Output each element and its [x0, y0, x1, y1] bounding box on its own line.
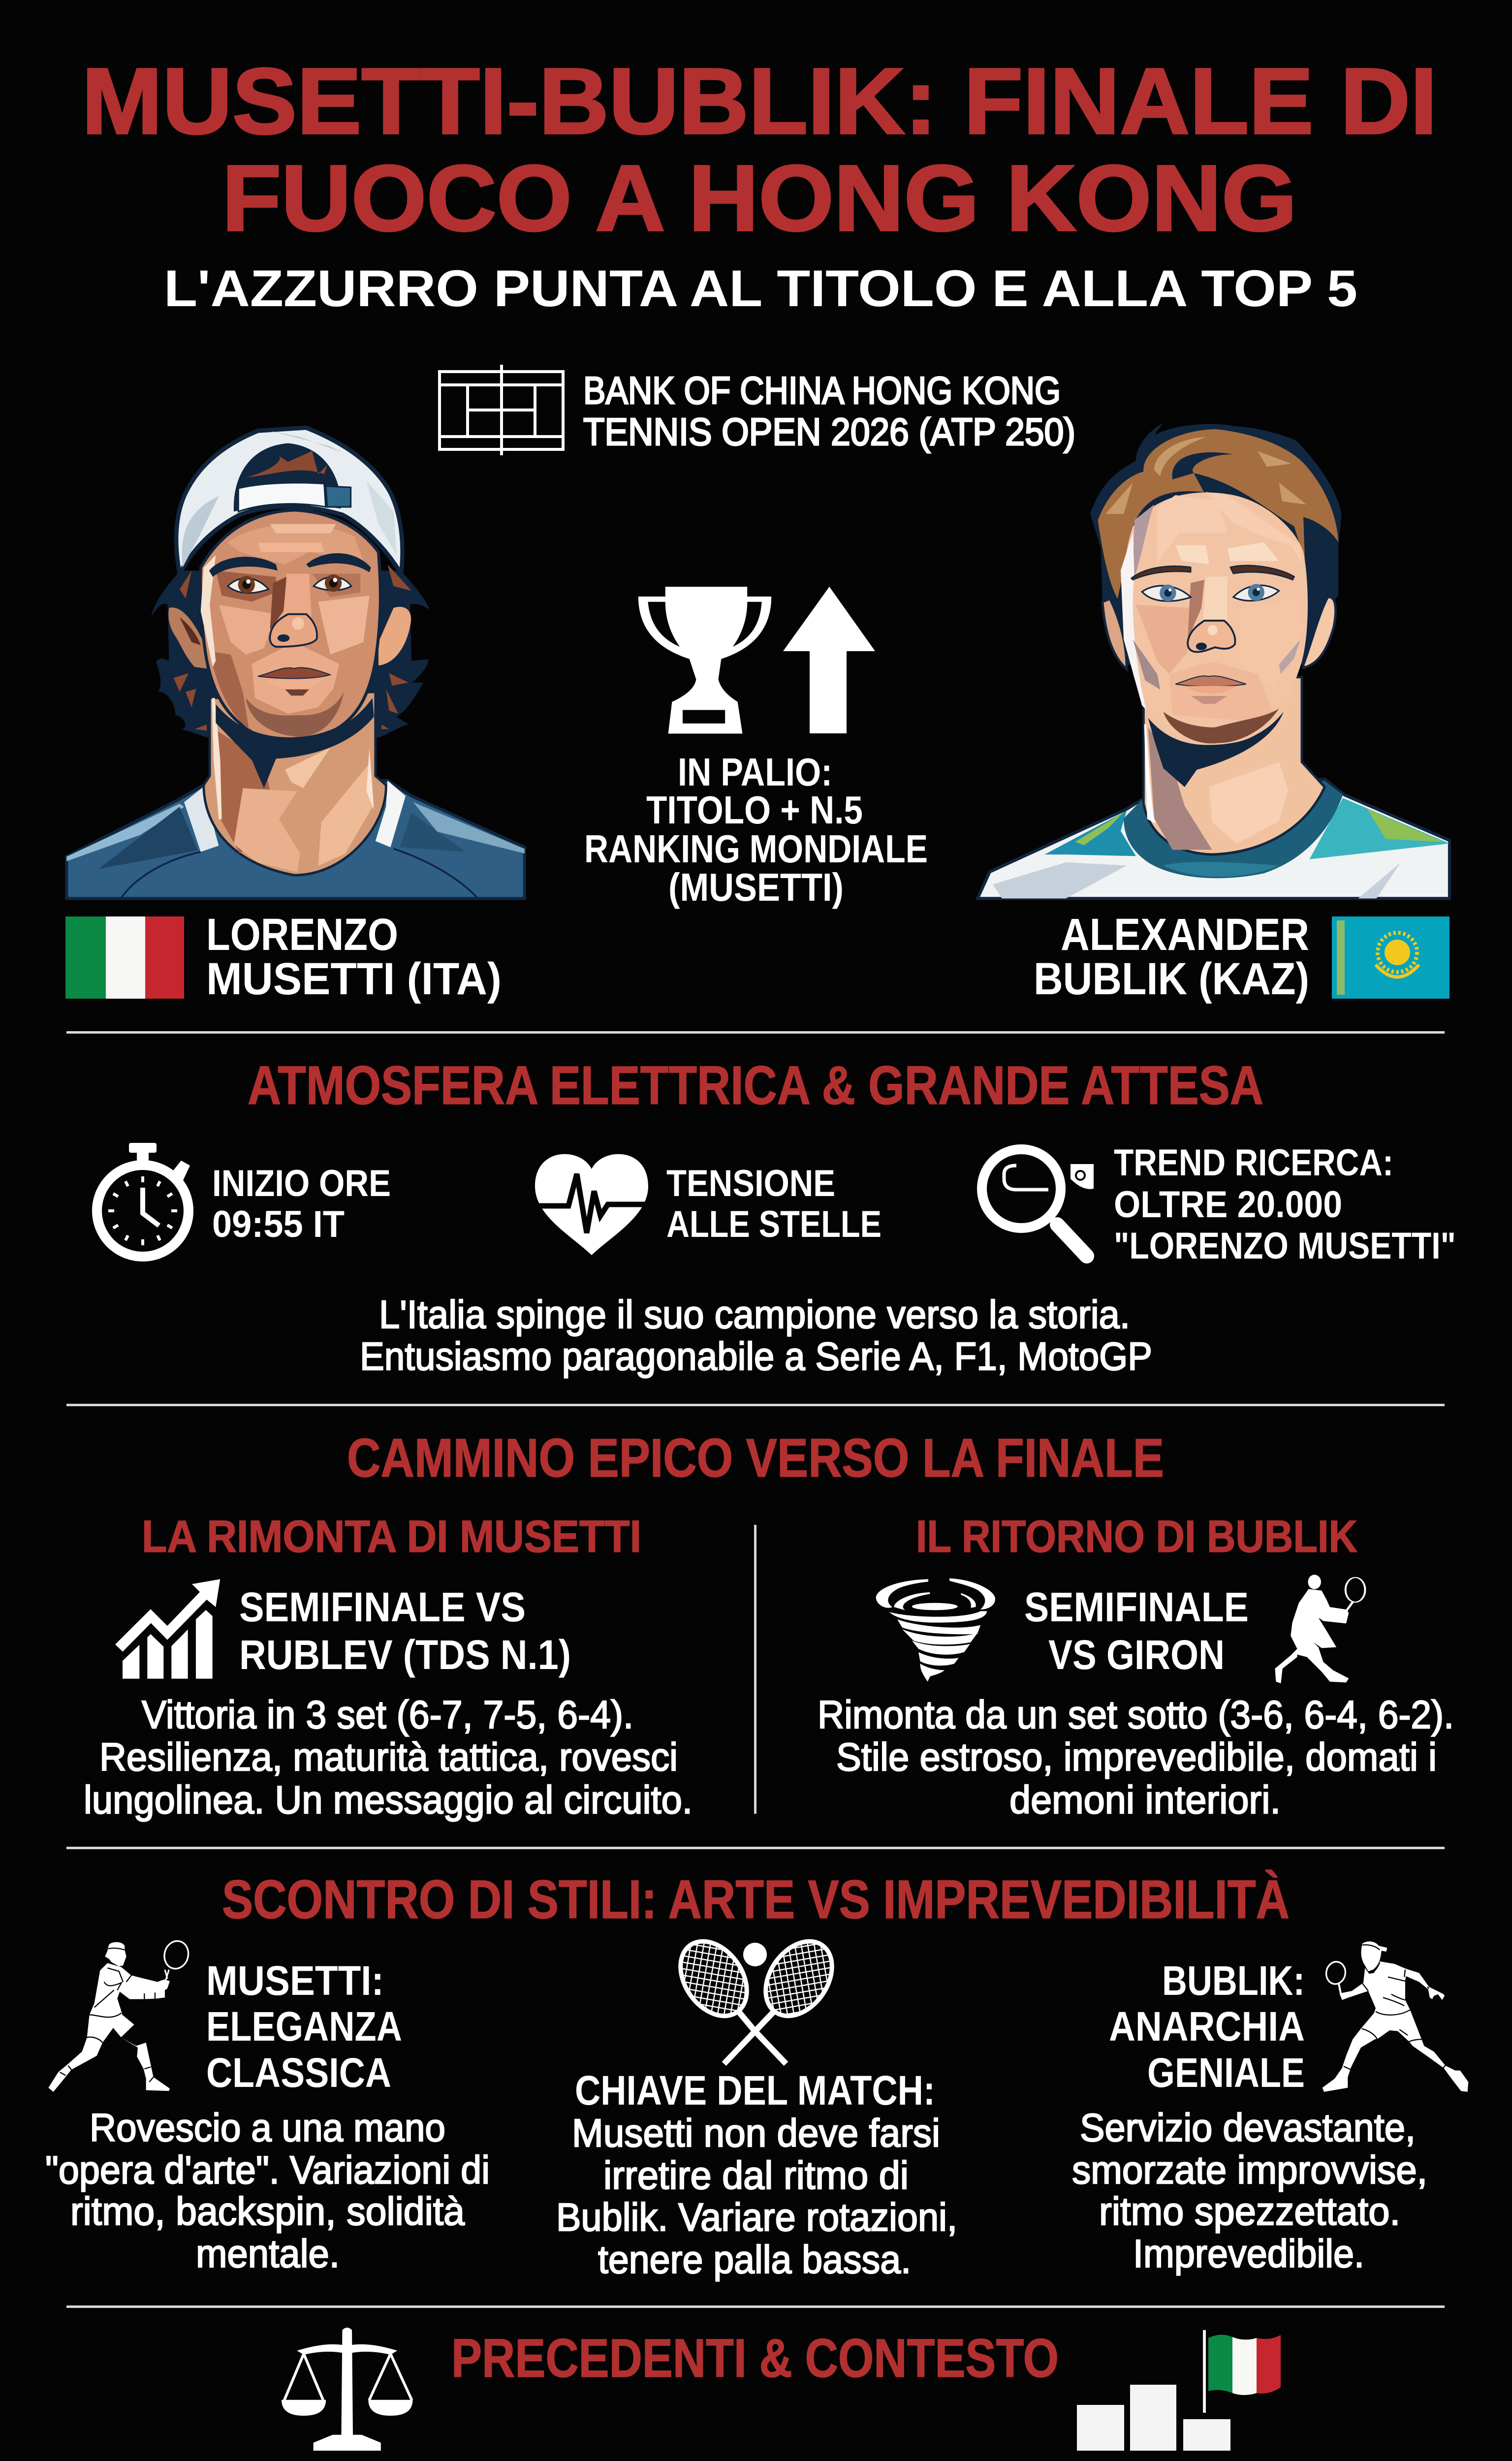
label: semifinal vs Giron: SEMIFINALE [1024, 1584, 1249, 1630]
icon: tornado [876, 1578, 995, 1682]
icon: up arrow [783, 587, 875, 733]
text: Bublik style description: Servizio devastante, [1080, 2106, 1416, 2149]
label: semifinal vs Giron [1024, 1584, 1249, 1678]
label: Musetti style [206, 1957, 402, 2096]
text: match key: Musetti non deve farsi [572, 2111, 940, 2155]
icon: rising chart [115, 1579, 220, 1679]
prize text: IN PALIO: [678, 750, 832, 794]
icon: scales [282, 2328, 412, 2451]
panel: Bublik style [1072, 1941, 1468, 2275]
label: Musetti style: CLASSICA [206, 2050, 391, 2096]
label: Musetti style: MUSETTI: [206, 1957, 384, 2004]
tournament name: TENNIS OPEN 2026 (ATP 250) [583, 410, 1075, 453]
heading: cammino: CAMMINO EPICO VERSO LA FINALE [347, 1428, 1164, 1488]
panel: Musetti style [45, 1938, 490, 2275]
flag: Kazakhstan [1332, 916, 1449, 999]
text: atmosphere description: L'Italia spinge il suo campione verso la storia. [379, 1293, 1130, 1336]
tournament name: BANK OF CHINA HONG KONG [583, 369, 1061, 412]
label: Bublik style: ANARCHIA [1109, 2003, 1305, 2050]
heading: scontro di stili: SCONTRO DI STILI: ARTE VS IMPREVEDIBILITÀ [222, 1869, 1290, 1930]
text: start time: INIZIO ORE [212, 1163, 391, 1204]
label: semifinal vs Rublev: SEMIFINALE VS [239, 1584, 526, 1630]
prize text: (MUSETTI) [668, 865, 844, 909]
title: MUSETTI-BUBLIK: FINALE DI [82, 49, 1437, 154]
text: match key [556, 2067, 957, 2281]
icon: tennis court [440, 365, 563, 455]
text: tension: TENSIONE [666, 1163, 835, 1204]
subheading: Musetti: LA RIMONTA DI MUSETTI [142, 1512, 641, 1562]
icon: Musetti player silhouette [48, 1938, 191, 2092]
icon: magnifying glass [982, 1149, 1094, 1256]
label: Musetti style: ELEGANZA [206, 2003, 402, 2050]
name: Lorenzo Musetti: LORENZO [206, 910, 398, 960]
text: match key: Bublik. Variare rotazioni, [556, 2195, 957, 2239]
title: FUOCO A HONG KONG [222, 146, 1297, 251]
text: Musetti description: Vittoria in 3 set (6-7, 7-5, 6-4). [142, 1693, 633, 1736]
text: tension [666, 1163, 882, 1245]
label: semifinal vs Rublev: RUBLEV (TDS N.1) [239, 1632, 571, 1678]
text: atmosphere description [360, 1293, 1152, 1378]
name: Alexander Bublik: ALEXANDER [1061, 910, 1309, 960]
text: Musetti style description: ritmo, backspin, solidità [70, 2189, 465, 2233]
text: search trend: OLTRE 20.000 [1114, 1184, 1342, 1226]
panel: match key [556, 1929, 957, 2281]
icon: heart with pulse [532, 1154, 652, 1255]
text: Bublik description: Rimonta da un set sotto (3-6, 6-4, 6-2). [818, 1693, 1454, 1736]
text: Bublik style description: smorzate improvvise, [1072, 2148, 1427, 2192]
label: semifinal vs Rublev [239, 1584, 571, 1678]
label: semifinal vs Giron: VS GIRON [1048, 1632, 1225, 1678]
panel: Musetti semifinal [84, 1512, 693, 1822]
portrait: Lorenzo Musetti [66, 428, 525, 899]
text: Musetti style description: "opera d'arte". Variazioni di [45, 2148, 490, 2192]
text: Bublik description [818, 1693, 1454, 1822]
label: Bublik style: BUBLIK: [1162, 1957, 1305, 2004]
text: Bublik description: Stile estroso, imprevedibile, domati i [836, 1735, 1437, 1779]
panel: Bublik semifinal [818, 1512, 1454, 1822]
name: Alexander Bublik: BUBLIK (KAZ) [1034, 954, 1309, 1004]
tournament name [583, 369, 1075, 453]
text: search trend [1114, 1142, 1456, 1267]
text: Bublik style description: ritmo spezzettato. [1099, 2189, 1400, 2233]
prize text: RANKING MONDIALE [584, 827, 928, 871]
text: start time [212, 1163, 391, 1245]
text: Bublik style description [1072, 2106, 1427, 2275]
text: tension: ALLE STELLE [666, 1203, 882, 1245]
icon: stopwatch [97, 1143, 190, 1257]
subheading: Bublik: IL RITORNO DI BUBLIK [916, 1512, 1357, 1562]
title [82, 49, 1437, 251]
prize text [584, 750, 928, 909]
label: Bublik style [1109, 1957, 1305, 2096]
text: Musetti description [84, 1693, 693, 1822]
text: match key: tenere palla bassa. [598, 2238, 911, 2281]
text: Musetti style description: mentale. [196, 2232, 340, 2275]
prize text: TITOLO + N.5 [646, 788, 863, 832]
text: Bublik description: demoni interiori. [1009, 1778, 1281, 1822]
name: Lorenzo Musetti: MUSETTI (ITA) [206, 954, 502, 1004]
text: start time: 09:55 IT [212, 1203, 345, 1245]
name: Lorenzo Musetti [206, 910, 502, 1004]
text: Musetti description: lungolinea. Un messaggio al circuito. [84, 1778, 693, 1822]
text: Bublik style description: Imprevedibile. [1133, 2232, 1364, 2275]
icon: podium with Italian flag [1077, 2330, 1281, 2451]
portrait: Alexander Bublik [977, 423, 1449, 898]
heading: atmosfera: ATMOSFERA ELETTRICA & GRANDE ATTESA [248, 1055, 1263, 1116]
text: Musetti style description [45, 2106, 490, 2275]
subtitle: L'AZZURRO PUNTA AL TITOLO E ALLA TOP 5 [164, 260, 1357, 317]
text: Musetti style description: Rovescio a una mano [90, 2106, 445, 2149]
flag: Italy [65, 916, 184, 999]
text: atmosphere description: Entusiasmo paragonabile a Serie A, F1, MotoGP [360, 1334, 1152, 1378]
label: Bublik style: GENIALE [1147, 2050, 1305, 2096]
text: match key: irretire dal ritmo di [603, 2153, 909, 2197]
icon: Bublik player silhouette [1323, 1941, 1468, 2092]
text: search trend: "LORENZO MUSETTI" [1114, 1225, 1456, 1267]
name: Alexander Bublik [1034, 910, 1309, 1004]
icon: crossed rackets and ball [667, 1929, 846, 2064]
text: search trend: TREND RICERCA: [1114, 1142, 1393, 1184]
icon: tennis player [1275, 1575, 1365, 1683]
heading: precedenti: PRECEDENTI & CONTESTO [451, 2328, 1059, 2389]
icon: trophy [638, 587, 771, 734]
text: Musetti description: Resilienza, maturità tattica, rovesci [99, 1735, 678, 1779]
text: match key: CHIAVE DEL MATCH: [575, 2067, 935, 2114]
